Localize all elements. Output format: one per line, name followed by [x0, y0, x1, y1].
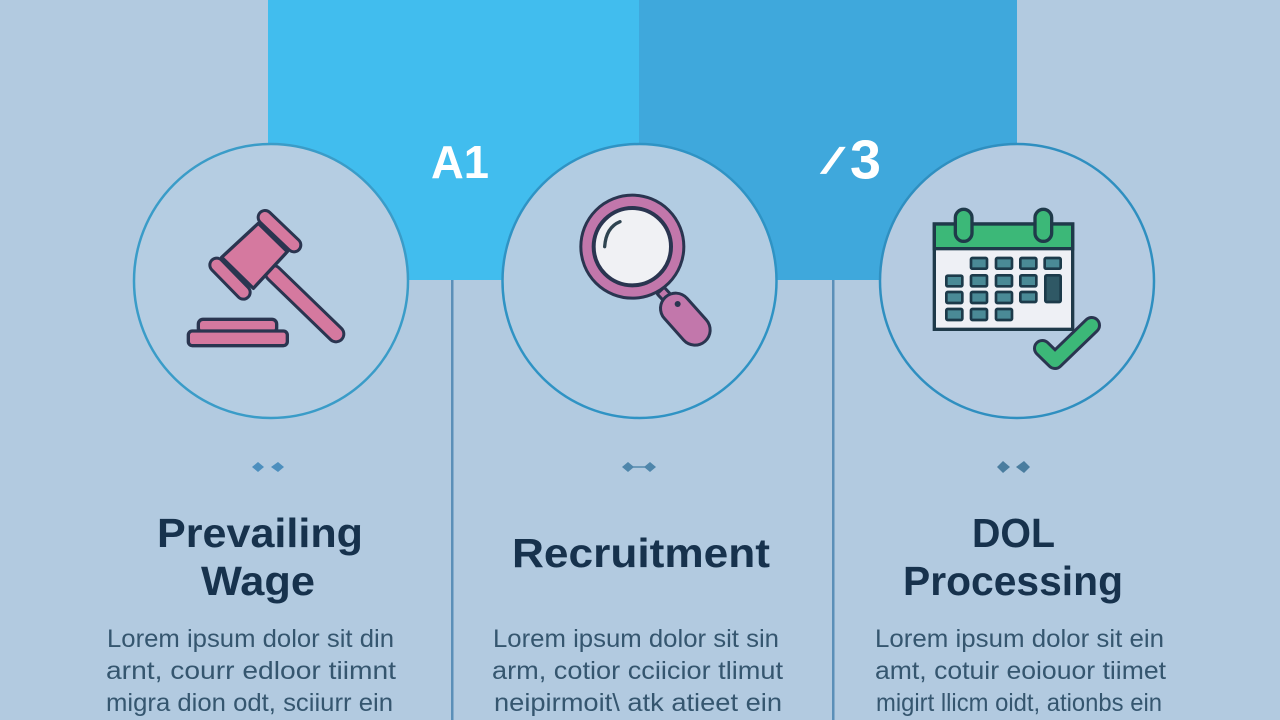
top band: darker blue block [639, 0, 1017, 280]
top band: light blue block [268, 0, 639, 280]
panel: DOL Processing [875, 144, 1166, 717]
connector dots [252, 462, 284, 472]
body text: amt, cotuir eoiouor tiimet [875, 657, 1166, 685]
body text: migra dion odt, sciiurr ein [106, 689, 393, 717]
body text: Lorem ipsum dolor sit sin [493, 625, 779, 653]
icon: gavel [188, 217, 336, 346]
body text [492, 625, 783, 717]
step label A1: A1 [431, 136, 489, 188]
icon: calendar with check [934, 209, 1092, 361]
panel: Recruitment [492, 144, 783, 717]
heading: DOL Processing: Processing [903, 558, 1123, 604]
connector dots [997, 461, 1030, 473]
step label /3 [818, 128, 881, 190]
step label /3: 3 [850, 128, 881, 190]
icon: magnifying glass [587, 201, 695, 330]
heading: DOL Processing [903, 510, 1123, 604]
body text: migirt llicm oidt, ationbs ein [876, 689, 1162, 717]
heading: Prevailing Wage: Prevailing [157, 510, 363, 556]
body text [875, 625, 1166, 717]
icon circle: gavel [134, 144, 408, 418]
heading: Prevailing Wage: Wage [201, 558, 315, 604]
connector dots [622, 462, 656, 472]
heading: Prevailing Wage [157, 510, 363, 604]
heading: Recruitment: Recruitment [512, 530, 770, 576]
body text: arnt, courr edloor tiimnt [106, 657, 396, 685]
body text: arm, cotior cciicior tlimut [492, 657, 783, 685]
body text: Lorem ipsum dolor sit ein [875, 625, 1164, 653]
body text: Lorem ipsum dolor sit din [107, 625, 394, 653]
body text [106, 625, 396, 717]
icon circle: magnifier [502, 144, 776, 418]
panel: Prevailing Wage [106, 144, 408, 717]
icon circle: calendar [880, 144, 1154, 418]
body text: neipirmoit\ atk atieet ein [494, 689, 782, 717]
heading: DOL Processing: DOL [972, 510, 1055, 556]
step label /3: / [818, 143, 847, 179]
